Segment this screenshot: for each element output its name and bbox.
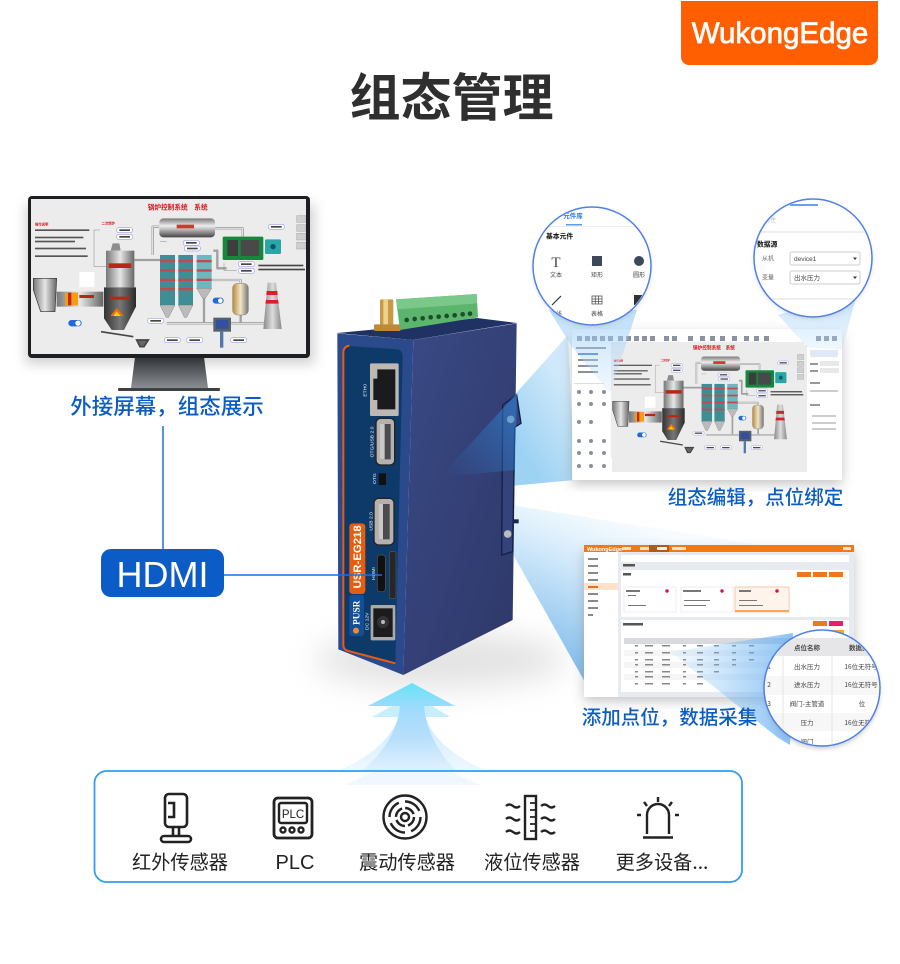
magnifier: data source: device1 — [794, 256, 817, 263]
editor screen — [572, 329, 842, 484]
port labels: USB 2.0 — [368, 512, 374, 531]
monitor frame — [28, 196, 310, 358]
magnifier: data source: 出水压力 — [794, 272, 820, 282]
brand badge: WukongEdge — [692, 17, 868, 50]
DIN rail clip — [502, 395, 521, 555]
monitor stand — [131, 357, 208, 388]
magnifier: data source: 变量 — [762, 272, 774, 282]
icon: alarm light — [637, 797, 679, 838]
icon: PLC — [274, 798, 312, 838]
magnifier: point table: 点位名称 — [794, 642, 820, 652]
editor left panel — [574, 347, 606, 468]
magnifier: point table: 2 — [767, 679, 771, 689]
magnifier: component library: 元件库 — [563, 210, 583, 220]
device body — [337, 323, 521, 675]
terminal block — [396, 294, 478, 330]
magnifier: data source: 属性 — [764, 215, 776, 224]
orange stripe — [343, 346, 395, 663]
magnifier: component library: 文本 — [550, 270, 562, 279]
magnifier: data source — [750, 199, 880, 319]
magnifier: component library: 圆形 — [633, 270, 645, 279]
data screen caption: 添加点位，数据采集 — [582, 701, 757, 730]
icon: infrared sensor — [161, 794, 191, 842]
magnifier: component library: T — [551, 255, 561, 271]
zoom cone: data source — [778, 290, 858, 350]
light beam to data screen — [505, 504, 760, 684]
magnifier: point table: 位 — [859, 698, 866, 708]
magnifier: component library: 矩形 — [591, 270, 603, 279]
SD slot — [389, 552, 396, 598]
connector: HDMI to device port — [224, 574, 382, 576]
port labels: OTG — [372, 473, 378, 484]
HDMI pill: HDMI — [116, 554, 208, 595]
title: 组态管理 — [349, 57, 554, 131]
monitor base — [118, 388, 220, 391]
zoom beam: table to magnifier — [670, 633, 793, 745]
zoom cone: component library — [549, 310, 637, 393]
magnifier: component library: 线 — [556, 309, 562, 318]
boiler control diagram on monitor — [31, 199, 306, 354]
translucent beam across device side — [440, 393, 517, 477]
side face — [403, 323, 517, 675]
sensor labels: 红外传感器 — [132, 847, 228, 875]
model label — [349, 523, 365, 594]
magnifier: point table: 1 — [767, 661, 771, 671]
HDMI port — [377, 555, 385, 592]
magnifier: point table — [760, 630, 885, 750]
icon: liquid level sensor — [506, 796, 555, 839]
editor right panel — [810, 350, 839, 430]
magnifier: point table: 阀门 — [800, 736, 814, 746]
sensor panel — [94, 771, 742, 882]
magnifier: point table: 16位无符号 — [844, 717, 878, 727]
sensor labels: PLC — [276, 852, 314, 874]
editor toolbar — [577, 336, 837, 341]
model label: USR-EG218 — [352, 525, 364, 588]
OTG switch — [379, 473, 386, 485]
port labels: OTG/USB 2.0 — [369, 426, 375, 457]
magnifier: point table: 进水压力 — [794, 679, 820, 689]
magnifier: component library: 表格 — [591, 309, 603, 318]
sensor labels — [132, 847, 708, 875]
top nav bar — [584, 545, 854, 553]
front face — [337, 333, 413, 675]
magnifier: component library — [530, 207, 655, 327]
brand badge — [681, 1, 878, 65]
magnifier: data source: 从机 — [762, 254, 774, 262]
port labels: ETH0 — [363, 384, 369, 397]
magnifier: point table: 3 — [767, 698, 771, 708]
antenna connector — [374, 299, 401, 331]
port labels — [363, 384, 378, 630]
brand label — [349, 595, 364, 636]
monitor — [26, 196, 314, 391]
icon: PLC: PLC — [282, 809, 304, 821]
brand label: PUSR — [352, 600, 362, 625]
editor caption: 组态编辑，点位绑定 — [668, 481, 843, 510]
port labels: HDMI — [371, 567, 377, 580]
sensor labels: 液位传感器 — [484, 847, 580, 875]
side menu — [584, 552, 618, 697]
magnifier: component library: 基本元件 — [546, 230, 573, 240]
device top face — [337, 318, 517, 340]
top nav bar: WukongEdge — [587, 547, 622, 553]
editor canvas — [612, 345, 807, 472]
USB port 1 — [376, 418, 395, 465]
port labels: DC 12V — [364, 612, 370, 630]
upward arrow — [338, 683, 487, 785]
data collection screen — [584, 545, 854, 701]
magnifier: point table: 出水压力 — [794, 661, 820, 671]
front dark panel — [343, 346, 403, 663]
boiler diagram in editor — [611, 342, 804, 458]
sensor labels: 震动传感器 — [359, 847, 455, 875]
magnifier: point table: 16位无符号 — [844, 661, 878, 671]
HDMI pill — [101, 549, 224, 597]
monitor caption: 外接屏幕，组态展示 — [70, 390, 264, 421]
USB port 2 — [374, 498, 394, 545]
icon: vibration sensor — [384, 796, 426, 838]
sensor labels: 更多设备... — [616, 847, 708, 875]
magnifier: point table: 数据类型 — [849, 642, 876, 652]
power socket — [371, 605, 395, 640]
light beam to editor screen — [510, 335, 575, 486]
magnifier: data source: 数据源 — [757, 238, 778, 248]
ethernet port — [370, 363, 399, 416]
connector: monitor to HDMI — [162, 426, 164, 550]
data points table — [621, 620, 849, 692]
magnifier: point table: 16位无符号 — [844, 679, 878, 689]
device ground shadow — [315, 632, 565, 688]
device cards panel — [621, 555, 849, 617]
magnifier: point table: 阀门-主管道 — [790, 698, 825, 708]
magnifier: point table: 压力 — [800, 717, 814, 727]
